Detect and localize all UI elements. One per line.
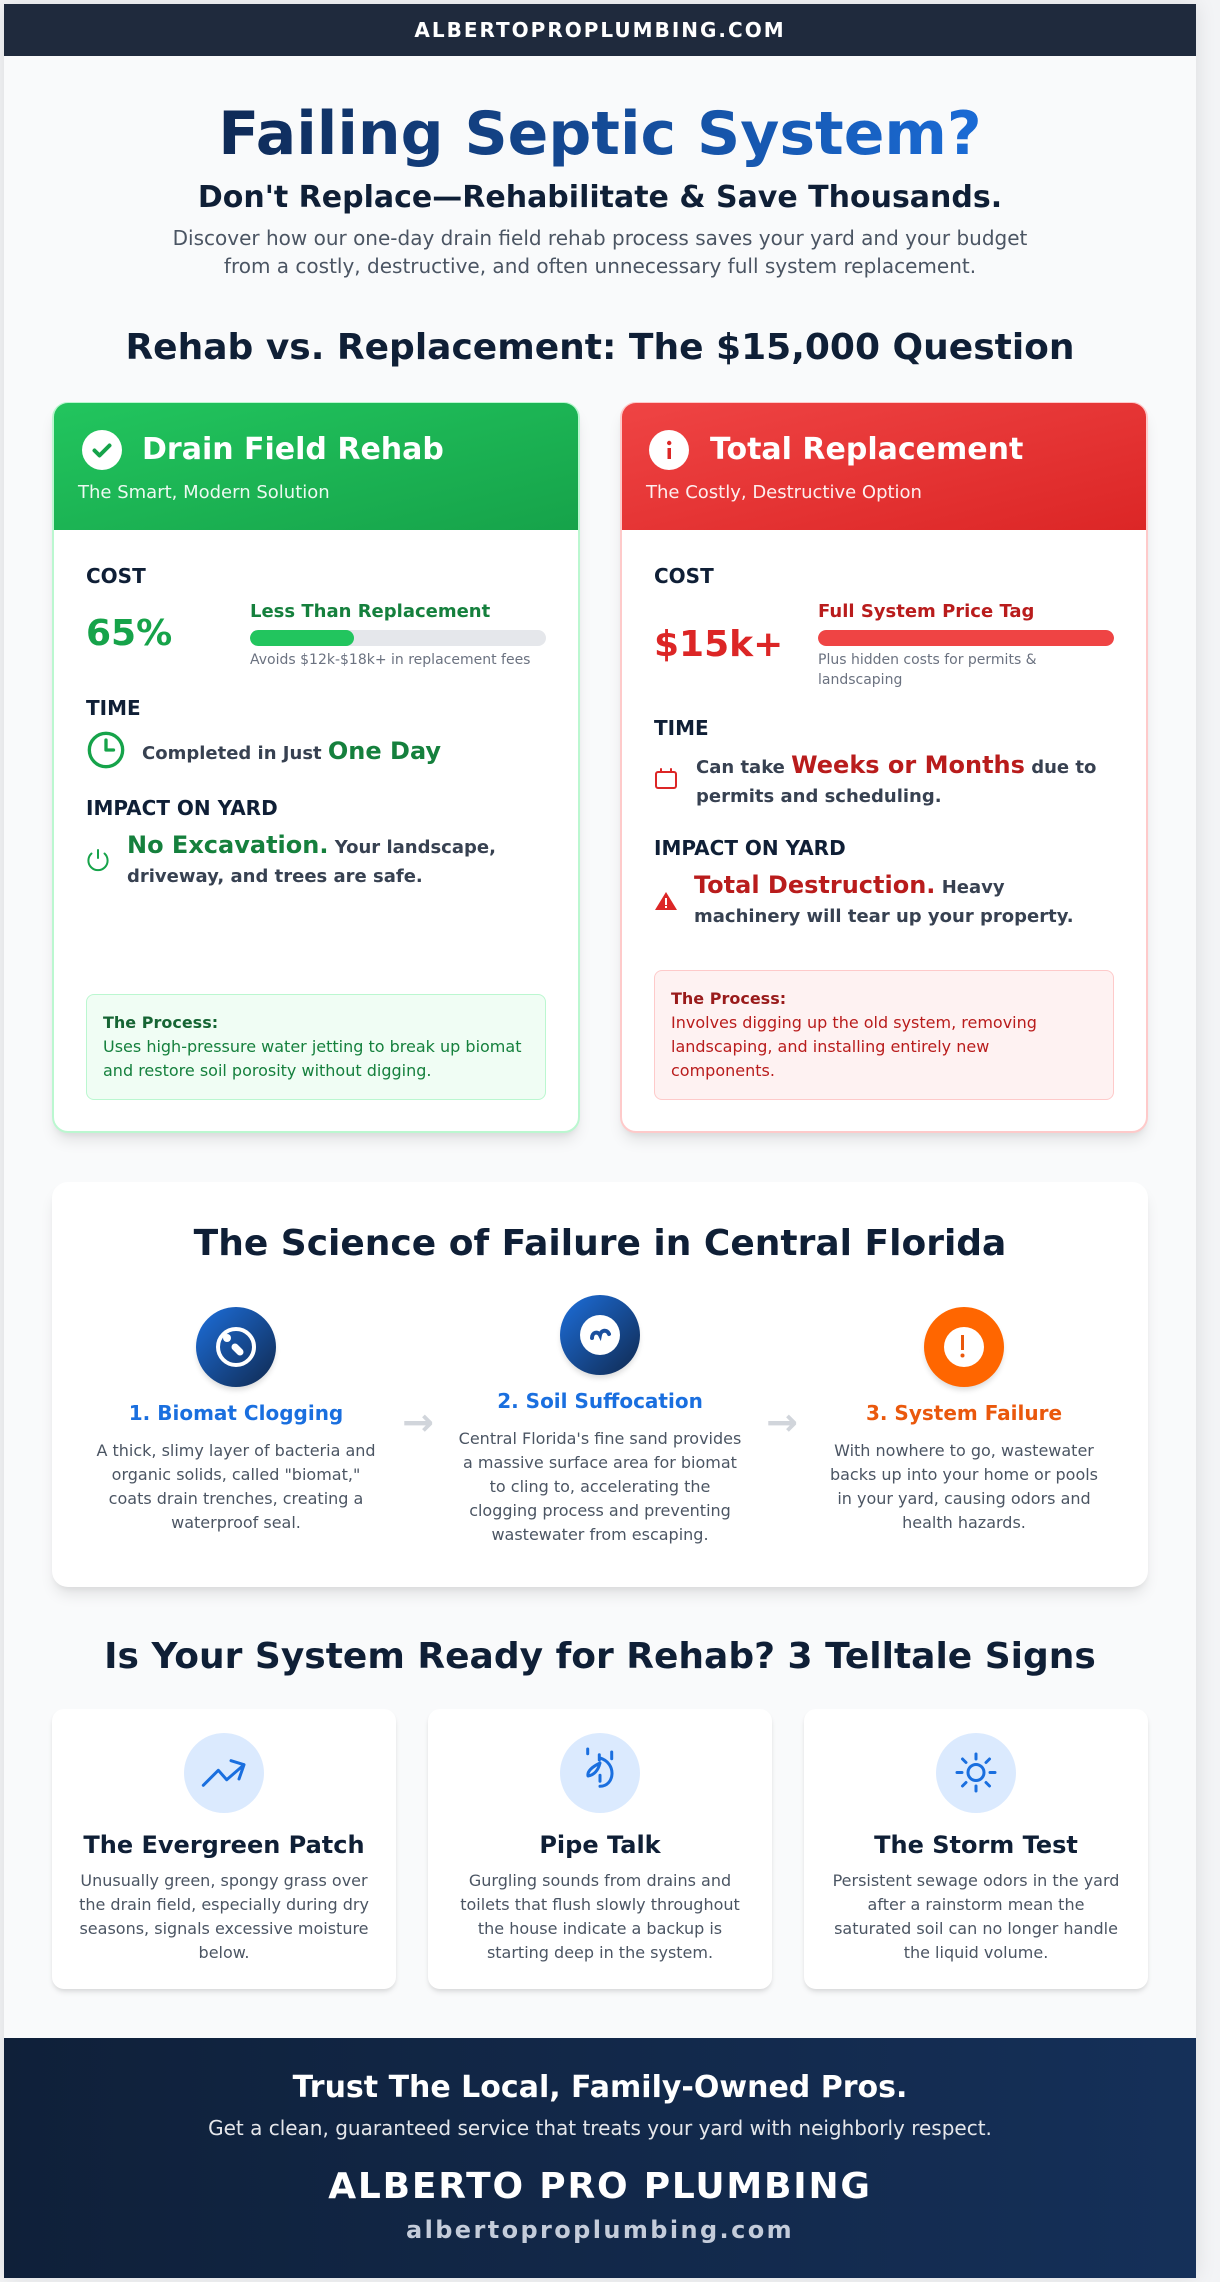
step 1 text [96,1441,376,1532]
step 2 text: wastewater from escaping. [491,1525,709,1544]
sign text: Gurgling sounds from drains and [469,1871,731,1890]
cost figure: $15k+ [654,624,783,665]
time text [696,751,1096,807]
time text: Can take Weeks or Months due to [696,751,1096,779]
icon: power [87,849,109,872]
time text: Completed in Just One Day [142,737,441,765]
rehab title: Drain Field Rehab [142,432,444,467]
company name: ALBERTO PRO PLUMBING [328,2166,872,2207]
sign text: the liquid volume. [904,1943,1048,1962]
icon: trending arrow [184,1733,264,1813]
footer tagline: Get a clean, guaranteed service that treats your yard with neighborly respect. [208,2116,992,2140]
time text: permits and scheduling. [696,786,942,807]
process note [86,994,546,1100]
impact text [127,831,496,887]
step 1 text: coats drain trenches, creating a [109,1489,363,1508]
icon: warning triangle [655,892,677,910]
arrow: → [766,1400,798,1444]
sign text: toilets that flush slowly throughout [460,1895,740,1914]
icon: gurgling pipe [560,1733,640,1813]
process note: and restore soil porosity without digging. [103,1061,431,1080]
icon: biomat [196,1307,276,1387]
step 3 text: health hazards. [902,1513,1026,1532]
sign card: evergreen patch [52,1709,396,1989]
icon: check circle [82,430,122,470]
sign text: starting deep in the system. [487,1943,713,1962]
intro paragraph: Discover how our one-day drain field rehab process saves your yard and your budget [173,226,1027,250]
step 1 [96,1307,376,1532]
intro paragraph [173,226,1027,278]
sign text: seasons, signals excessive moisture [79,1919,369,1938]
footer [4,2038,1196,2278]
comparison heading: Rehab vs. Replacement: The $15,000 Question [125,327,1075,368]
process note: Involves digging up the old system, removing [671,1013,1037,1032]
icon: sun [936,1733,1016,1813]
title: Failing Septic System? [218,99,982,169]
impact label: IMPACT ON YARD [654,836,846,860]
step 2 text: to cling to, accelerating the [490,1477,710,1496]
top bar: website: ALBERTOPROPLUMBING.COM [414,18,786,42]
cost label: COST [654,564,714,588]
time label: TIME [86,696,141,720]
panel: total replacement [620,402,1148,1133]
step 2 text: Central Florida's fine sand provides [459,1429,741,1448]
impact text: driveway, and trees are safe. [127,866,423,887]
sign text: the drain field, especially during dry [79,1895,369,1914]
intro paragraph: from a costly, destructive, and often unnecessary full system replacement. [224,254,976,278]
top bar: website [4,4,1196,56]
sign card: storm test [804,1709,1148,1989]
process note: The Process: [671,989,786,1008]
signs heading: Is Your System Ready for Rehab? 3 Telltale Signs [104,1636,1096,1677]
process note: The Process: [103,1013,218,1032]
process note: Uses high-pressure water jetting to break up biomat [103,1037,521,1056]
sign text [79,1871,369,1962]
cost note [818,652,1037,688]
step 1 text: A thick, slimy layer of bacteria and [96,1441,376,1460]
impact text: Total Destruction. Heavy [694,871,1005,899]
sign text: saturated soil can no longer handle [834,1919,1118,1938]
step 3 text [830,1441,1098,1532]
sign title: Pipe Talk [539,1831,661,1859]
cost note: landscaping [818,672,902,688]
arrow: → [402,1400,434,1444]
process note: components. [671,1061,775,1080]
replacement tagline: The Costly, Destructive Option [646,482,922,503]
footer headline: Trust The Local, Family-Owned Pros. [293,2070,907,2105]
sign card: pipe talk [428,1709,772,1989]
step 1 text: waterproof seal. [171,1513,301,1532]
step 3 text: With nowhere to go, wastewater [834,1441,1094,1460]
cost bar label: Less Than Replacement [250,601,490,622]
icon: clock [88,732,124,768]
science heading: The Science of Failure in Central Florida [194,1223,1006,1264]
sign text: the house indicate a backup is [478,1919,722,1938]
sign text: Unusually green, spongy grass over [80,1871,368,1890]
step 2 text: clogging process and preventing [469,1501,731,1520]
cost bar [818,630,1114,646]
panel: drain field rehab [52,402,580,1133]
rehab tagline: The Smart, Modern Solution [78,482,330,503]
subtitle: Don't Replace—Rehabilitate & Save Thousands. [198,180,1002,215]
step 2 [459,1295,741,1544]
icon: soil [560,1295,640,1375]
cost figure: 65% [86,613,172,654]
impact text: machinery will tear up your property. [694,906,1074,927]
cost bar label: Full System Price Tag [818,601,1034,622]
sign text: below. [199,1943,249,1962]
cost bar [250,630,546,646]
cost note: Avoids $12k-$18k+ in replacement fees [250,652,530,668]
icon: calendar [655,768,677,789]
icon: info circle [649,430,689,470]
step 2 title: 2. Soil Suffocation [497,1389,703,1413]
step 3 title: 3. System Failure [866,1401,1062,1425]
step 1 title: 1. Biomat Clogging [129,1401,343,1425]
sign text [833,1871,1119,1962]
icon: failure alert [924,1307,1004,1387]
impact text [694,871,1074,927]
cost label: COST [86,564,146,588]
replacement card header [622,403,1146,530]
process note [654,970,1114,1100]
sign title: The Storm Test [874,1831,1078,1859]
panel: science of failure [52,1182,1148,1587]
sign text [460,1871,740,1962]
rehab card header [54,403,578,530]
impact label: IMPACT ON YARD [86,796,278,820]
sign title: The Evergreen Patch [83,1831,365,1859]
step 3 [830,1307,1098,1532]
sign text: Persistent sewage odors in the yard [833,1871,1119,1890]
footer url: albertoproplumbing.com [406,2216,794,2244]
replacement title: Total Replacement [710,432,1023,467]
impact text: No Excavation. Your landscape, [127,831,496,859]
step 3 text: in your yard, causing odors and [837,1489,1091,1508]
cost note: Plus hidden costs for permits & [818,652,1037,668]
step 1 text: organic solids, called "biomat," [112,1465,360,1484]
time label: TIME [654,716,709,740]
step 2 text: a massive surface area for biomat [463,1453,737,1472]
step 2 text [459,1429,741,1544]
process note: landscaping, and installing entirely new [671,1037,989,1056]
step 3 text: backs up into your home or pools [830,1465,1098,1484]
sign text: after a rainstorm mean the [868,1895,1084,1914]
